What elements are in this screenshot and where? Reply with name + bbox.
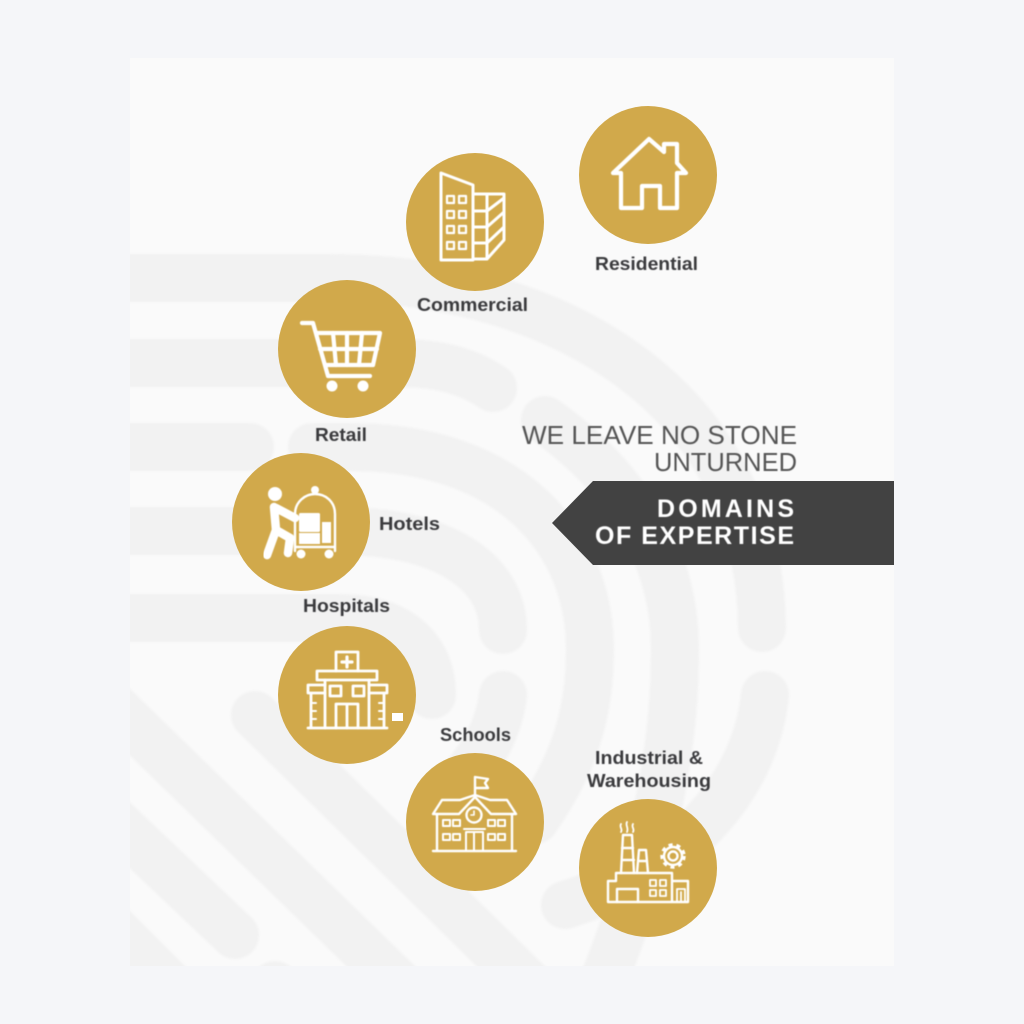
item: industrial and warehousing	[579, 748, 717, 937]
banner: domains of expertise: OF EXPERTISE	[595, 522, 794, 550]
icon: house	[613, 139, 686, 208]
item: schools	[406, 725, 544, 891]
label: industrial and warehousing: Warehousing	[587, 771, 711, 791]
icon: factory with gear	[608, 822, 688, 902]
label: industrial and warehousing: Industrial &	[595, 748, 703, 768]
panel: textured background	[130, 58, 894, 966]
background fingerprint pattern	[100, 278, 765, 995]
label: hospitals: Hospitals	[303, 596, 390, 616]
label: industrial and warehousing	[587, 748, 711, 791]
icon: school building	[433, 777, 516, 851]
small white tag	[392, 713, 403, 721]
icon: hospital building	[308, 652, 387, 728]
item: hospitals	[278, 596, 416, 764]
banner: domains of expertise: DOMAINS	[657, 495, 794, 523]
tagline: UNTURNED	[654, 447, 797, 477]
icon: shopping cart	[302, 323, 380, 392]
label: hotels: Hotels	[379, 514, 440, 534]
item: retail	[278, 280, 416, 445]
item: commercial	[406, 153, 544, 315]
item: hotels	[232, 453, 440, 591]
item: residential	[579, 106, 717, 274]
tagline: WE LEAVE NO STONE	[522, 420, 797, 450]
label: schools: Schools	[440, 725, 511, 745]
icon: porter with luggage cart	[267, 486, 335, 558]
label: retail: Retail	[315, 425, 367, 445]
label: residential: Residential	[595, 254, 698, 274]
tagline	[522, 420, 797, 477]
banner: domains of expertise	[552, 481, 894, 565]
label: commercial: Commercial	[417, 295, 528, 315]
icon: office building	[441, 173, 504, 260]
